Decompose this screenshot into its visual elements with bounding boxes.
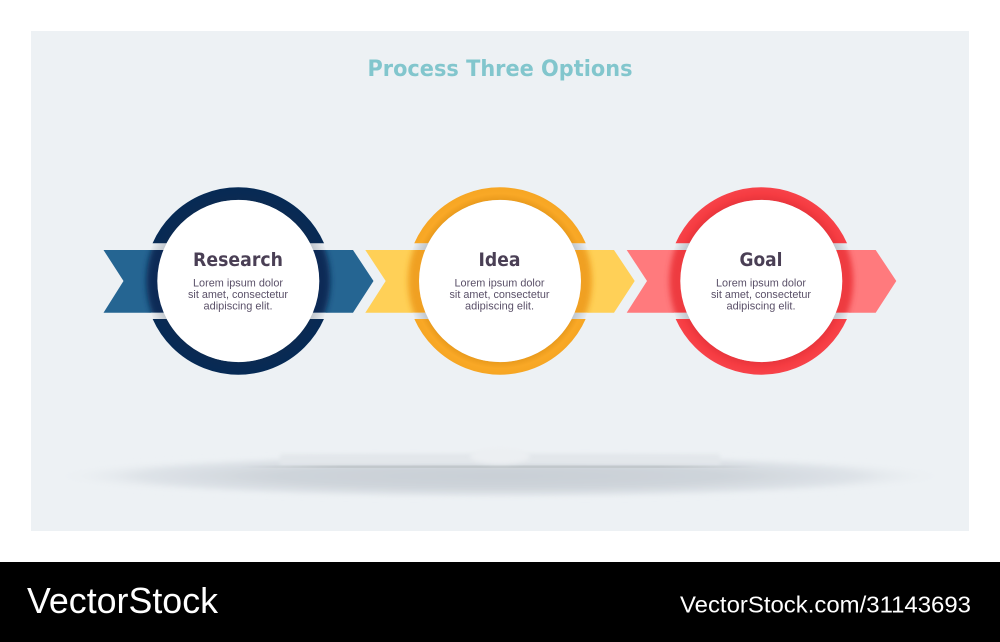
step 1: Research (104, 188, 374, 374)
ring: navy (145, 188, 331, 374)
inner white circle (419, 200, 581, 362)
step 3: Goal (627, 188, 896, 374)
watermark url: VectorStock.com/31143693 (680, 592, 971, 618)
arrow ribbon: blue (104, 250, 374, 313)
description: Goal: adipiscing elit. (726, 300, 796, 312)
description: Research: adipiscing elit. (204, 300, 272, 312)
step 2: Idea (365, 188, 635, 374)
heading: Goal: Goal (740, 249, 782, 271)
watermark bar (0, 562, 1000, 642)
title: Process Three Options (368, 57, 632, 82)
description: Research: sit amet, consectetur (188, 289, 288, 301)
arrow ribbon: yellow (365, 250, 635, 313)
description: Idea (450, 278, 550, 312)
description: Idea: adipiscing elit. (465, 300, 534, 312)
description: Goal (711, 278, 811, 312)
description: Goal: sit amet, consectetur (711, 289, 811, 301)
heading: Research: Research (193, 249, 283, 271)
description: Idea: Lorem ipsum dolor (454, 278, 545, 290)
description: Idea: sit amet, consectetur (450, 289, 550, 301)
ring: orange (407, 188, 593, 374)
description: Research: Lorem ipsum dolor (193, 278, 283, 290)
description: Goal: Lorem ipsum dolor (716, 278, 806, 290)
description: Research (188, 278, 288, 312)
floor shadow (50, 448, 950, 499)
inner white circle (680, 200, 842, 362)
heading: Idea: Idea (478, 249, 520, 271)
arrow ribbon: coral (627, 250, 896, 313)
ring: red (668, 188, 854, 374)
background panel (31, 31, 969, 531)
inner white circle (157, 200, 319, 362)
watermark logo: VectorStock (27, 580, 219, 621)
